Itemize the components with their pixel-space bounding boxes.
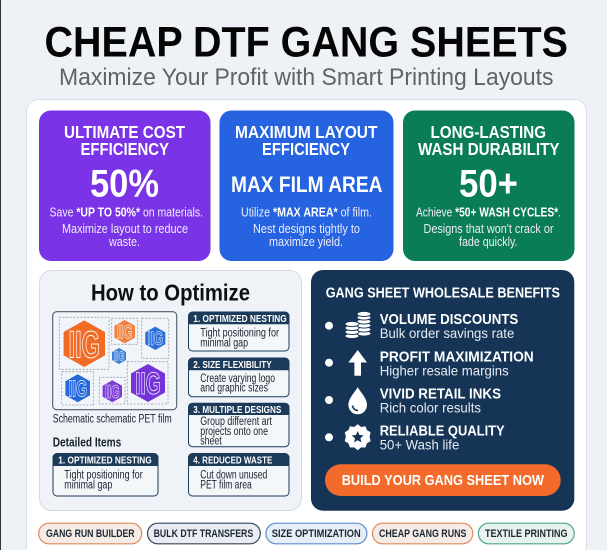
main white panel (26, 100, 586, 550)
benefit: profit maximization: PROFIT MAXIMIZATION (380, 348, 534, 365)
benefit: reliable quality: RELIABLE QUALITY (380, 423, 505, 440)
tag: size optimization (266, 523, 367, 544)
icon: star badge (345, 424, 371, 450)
tag: cheap gang runs (372, 523, 473, 544)
heading: wholesale benefits: GANG SHEET WHOLESALE BENEFITS (326, 286, 560, 302)
tag: size optimization: SIZE OPTIMIZATION (272, 528, 361, 540)
step box: optimized nesting: 1. OPTIMIZED NESTING (193, 313, 287, 325)
caption: Schematic schematic PET film (53, 414, 172, 426)
benefit: vivid retail inks: VIVID RETAIL INKS (380, 385, 501, 402)
panel: layout efficiency card: MAXIMUM LAYOUT (235, 122, 378, 142)
tag: gang run builder: GANG RUN BUILDER (46, 528, 135, 540)
panel: layout efficiency card: Nest designs tightly to (253, 221, 360, 236)
subheading: detailed items: Detailed Items (53, 435, 121, 450)
panel: wash durability card: WASH DURABILITY (418, 139, 560, 159)
logo: small orange: IIG (117, 323, 133, 344)
step box: reduced waste: 4. REDUCED WASTE (193, 455, 272, 467)
logo: small purple: IIG (105, 382, 120, 402)
button: build your gang sheet: BUILD YOUR GANG SHEET NOW (342, 472, 545, 489)
step box: optimized nesting: Tight positioning for (200, 327, 279, 339)
tag: bulk dtf transfers: BULK DTF TRANSFERS (154, 528, 253, 540)
step box: size flexibility: 2. SIZE FLEXIBILITY (193, 359, 272, 371)
step box: optimized nesting: minimal gap (200, 337, 248, 349)
benefit: reliable quality (325, 423, 505, 452)
step box: size flexibility (188, 358, 289, 397)
logo: large orange: IIG (69, 324, 100, 366)
panel: how to optimize (40, 270, 302, 510)
panel: wash durability card: LONG-LASTING (430, 122, 546, 142)
step box: optimized nesting (detail): minimal gap (64, 479, 112, 491)
step box: optimized nesting (detail): 1. OPTIMIZED NESTING (58, 455, 152, 467)
panel: wholesale benefits (311, 270, 574, 511)
panel: wash durability card: Designs that won't crack or (424, 221, 554, 236)
step box: reduced waste: PET film area (200, 479, 252, 491)
step box: optimized nesting (detail) (53, 454, 158, 496)
logo: blue: IIG (147, 329, 163, 350)
step box: multiple designs: sheet (200, 435, 222, 447)
heading: how to optimize: How to Optimize (91, 280, 250, 306)
benefit: vivid retail inks (325, 385, 501, 415)
benefit: volume discounts: Bulk order savings rate (380, 325, 514, 341)
panel: wash durability card (403, 110, 574, 261)
tag: cheap gang runs: CHEAP GANG RUNS (379, 528, 466, 540)
panel: cost efficiency card: Maximize layout to reduce (62, 221, 188, 236)
panel: cost efficiency card: waste. (108, 234, 140, 249)
tags row (39, 523, 574, 544)
benefit: vivid retail inks: Rich color results (380, 399, 481, 415)
panel: layout efficiency card: MAX FILM AREA (231, 172, 382, 197)
logo: tiny blue: IIG (114, 349, 124, 364)
icon: up arrow (348, 350, 367, 376)
step box: optimized nesting (detail): Tight positioning for (64, 469, 143, 481)
panel: wash durability card: Achieve *50+ WASH CYCLES*. (416, 204, 561, 219)
logo: medium blue: IIG (68, 376, 87, 402)
panel: layout efficiency card: maximize yield. (269, 234, 343, 249)
panel: wash durability card: fade quickly. (459, 234, 518, 249)
panel: cost efficiency card (39, 110, 210, 261)
benefit: profit maximization (325, 348, 534, 378)
panel: cost efficiency card: Save *UP TO 50%* on materials. (50, 204, 203, 219)
tag: gang run builder (39, 523, 142, 544)
title: CHEAP DTF GANG SHEETS (44, 18, 568, 66)
panel: cost efficiency card: 50% (90, 162, 159, 206)
step box: reduced waste: Cut down unused (200, 469, 267, 481)
icon: ink drop (348, 387, 367, 414)
panel: layout efficiency card (220, 110, 394, 261)
step box: multiple designs: 3. MULTIPLE DESIGNS (193, 404, 281, 416)
benefit: volume discounts: VOLUME DISCOUNTS (380, 311, 518, 328)
step box: optimized nesting (188, 312, 289, 351)
benefit: volume discounts (325, 311, 518, 341)
benefit: reliable quality: 50+ Wash life (380, 436, 459, 452)
step box: multiple designs (188, 403, 289, 447)
panel: layout efficiency card: Utilize *MAX AREA* of film. (241, 204, 372, 219)
tag: bulk dtf transfers (148, 523, 260, 544)
panel: cost efficiency card: ULTIMATE COST (64, 122, 185, 142)
panel: layout efficiency card: EFFICIENCY (262, 139, 350, 159)
subtitle: Maximize Your Profit with Smart Printing Layouts (59, 64, 554, 91)
button: build your gang sheet (325, 464, 561, 496)
logo: large purple: IIG (135, 366, 161, 401)
step box: multiple designs: projects onto one (200, 426, 268, 438)
panel: cost efficiency card: EFFICIENCY (80, 139, 169, 159)
step box: size flexibility: and graphic sizes (200, 383, 268, 395)
step box: multiple designs: Group different art (200, 416, 273, 428)
step box: reduced waste (188, 454, 289, 496)
step box: size flexibility: Create varying logo (200, 373, 275, 385)
diagram: PET film layout (53, 312, 177, 410)
icon: coins (345, 311, 371, 339)
tag: textile printing (478, 523, 574, 544)
tag: textile printing: TEXTILE PRINTING (485, 528, 568, 540)
panel: wash durability card: 50+ (459, 162, 518, 206)
benefit: profit maximization: Higher resale margins (380, 362, 509, 378)
